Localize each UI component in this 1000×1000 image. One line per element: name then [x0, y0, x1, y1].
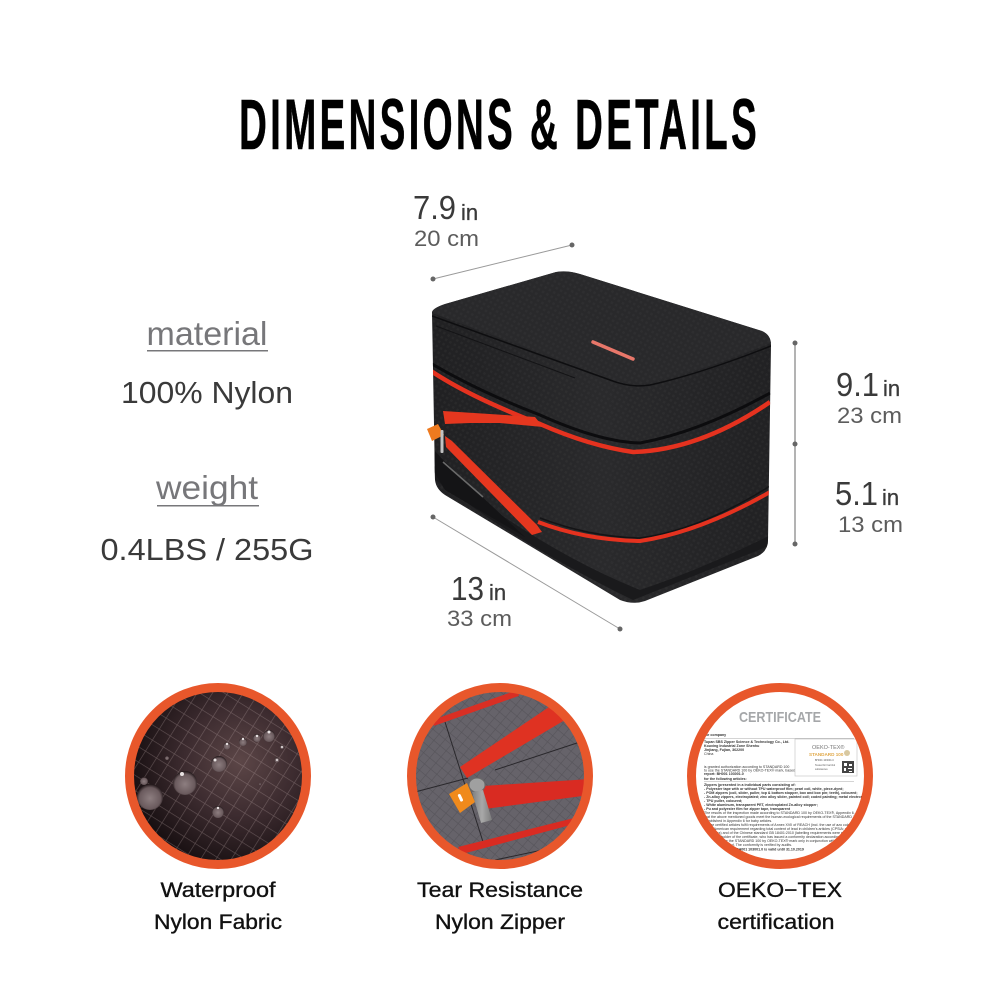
dimension: depth 13 in: 33 cm [447, 606, 512, 631]
certificate body text: BH001 103001.0 is valid until 31.10.2019 [736, 848, 804, 852]
dimension: width 7.9 in: 20 cm [414, 226, 479, 251]
certificate body text: China [704, 752, 713, 756]
dimension: height 9.1 in and 5.1 in: 13 cm [838, 512, 903, 537]
silver zipper pull [469, 778, 485, 792]
certificate body text: Jinjiang, Fujian, 362200 [704, 748, 744, 752]
droplet highlights [180, 730, 283, 809]
caption: tear resistance nylon zipper: Nylon Zipper [435, 911, 565, 934]
certificate body text: - Pu and polyester film for zipper tape, transparent [704, 807, 791, 811]
dimension: height 9.1 in and 5.1 in: 5.1 [835, 475, 878, 512]
lower red zipper line [538, 492, 770, 541]
zipper pull [440, 430, 444, 453]
red zipper tape top [433, 693, 518, 723]
lid handle [593, 342, 633, 359]
certificate body text: Zippers (presented in a individual parts consisting of: [704, 783, 796, 787]
certificate body text: The results of the inspection made according to STANDARD 100 by OEKO-TEX®, Appendix 6, product class II have shown [704, 811, 900, 815]
certificate body text [704, 734, 862, 850]
certificate body text: tested. The conformity is verified by audits. [724, 843, 792, 847]
red zipper band large [460, 705, 565, 778]
certificate body text: report: BH001 103001.0 [704, 772, 744, 776]
dimension: height 9.1 in and 5.1 in: in [882, 485, 899, 510]
certificate body text: - TPU puller, coloured; [704, 799, 742, 803]
dimension: width 7.9 in [413, 189, 574, 282]
certificate body text: the American requirement regarding total content of lead in children's articles (CPSIA; with the exception of accessories [708, 827, 898, 831]
certificate body text: Kouxing Industrial Zone Shenhu [704, 744, 759, 748]
ripstop grid [134, 692, 302, 860]
dimension: height 9.1 in and 5.1 in: in [883, 376, 900, 401]
grey ripstop background [416, 692, 584, 860]
orange tag [427, 424, 444, 441]
red zipper band middle [483, 779, 590, 809]
caption: OEKO-TEX certification: certification [718, 911, 834, 934]
dimension: height 9.1 in and 5.1 in: 23 cm [837, 403, 902, 428]
orange ring [692, 688, 868, 864]
OEKO-TEX label box: OEKO-TEX® [812, 744, 844, 751]
detail: waterproof fabric circle [125, 683, 311, 869]
caption: tear resistance nylon zipper [417, 879, 583, 934]
value: 100% Nylon: 100% Nylon [121, 375, 293, 410]
OEKO-TEX label box: BH001 103001.0 [815, 759, 834, 762]
value: 0.4LBS / 255G: 0.4LBS / 255G [100, 532, 314, 567]
caption: OEKO-TEX certification [718, 879, 842, 934]
caption: OEKO-TEX certification: OEKO−TEX [718, 879, 842, 902]
certificate body text: to use the STANDARD 100 by OEKO-TEX® mark, based [704, 768, 795, 772]
certificate body text: The certified articles fulfil requirements of Annex XVII of REACH (incl. the use of azo colourants, nickel release, etc.), [708, 823, 894, 827]
certificate body text: is granted authorization according to STANDARD 100 [704, 765, 789, 769]
dimension: width 7.9 in: in [461, 200, 478, 225]
certificate body text: - White aluminum, transparent PET, electroplated Zn-alloy stopper; [704, 803, 818, 807]
certificate body text: - Polyester tape with or without TPU waterproof film; pearl coil, white, piece-dyed; [704, 787, 844, 791]
dimension: depth 13 in [430, 514, 622, 632]
orange ring [130, 688, 306, 864]
certificate body text: the company [704, 733, 726, 737]
certificate body text: to use the STANDARD 100 by OEKO-TEX® mark only in conjunction with products that conform with the sample [718, 839, 897, 843]
certificate body text: established in Appendix 6 for baby articles. [704, 819, 772, 823]
caption: waterproof nylon fabric: Nylon Fabric [154, 911, 282, 934]
zipper flap upper [443, 411, 543, 427]
certificate body text: The holder of the certificate, who has issued a conformity declaration according to ISO 17050-1, is under an obligation [714, 835, 902, 839]
text block: weight [100, 469, 314, 567]
black handle strip [434, 450, 502, 516]
text block: material [121, 315, 293, 410]
upper zipper shadow [432, 364, 770, 443]
dimension: width 7.9 in: 7.9 [413, 189, 456, 226]
certificate body text: - Zn-alloy zippers, electroplated; zinc alloy slider, painted coil; coded painting; metal electroplated; [704, 795, 873, 799]
dimension: height 9.1 in and 5.1 in [792, 340, 903, 546]
fabric seams [415, 722, 590, 860]
OEKO-TEX label box: substances [815, 768, 828, 771]
heading: weight: weight [155, 469, 258, 506]
certificate body text: that the above mentioned goods meet the human-ecological requirements of the STANDARD 100 by OEKO-TEX® presently [704, 815, 902, 819]
certificate body text: of glass) and of the Chinese standard GB 18401:2010 (labelling requirements were not verified). [708, 831, 861, 835]
upper red zipper line [431, 371, 770, 452]
fabric background [134, 692, 302, 860]
orange ring [412, 688, 588, 864]
bag body [425, 265, 775, 610]
red zipper tape bottom [458, 817, 578, 854]
dimension: depth 13 in: 13 [451, 570, 484, 607]
certificate body text: for the following articles: [704, 777, 747, 781]
detail: nylon zipper circle [408, 684, 592, 868]
certificate body text: Tupan SBS Zipper Science & Technology Co., Ltd. [704, 740, 789, 744]
dimension: height 9.1 in and 5.1 in: 9.1 [836, 366, 879, 403]
detail: OEKO-TEX certificate circle [690, 686, 902, 866]
dimension: depth 13 in: in [489, 580, 506, 605]
certificate body text: - POM zippers (coil, slider, puller, top & bottom stopper, box and box pin; teeth), coloured; [704, 791, 858, 795]
lower zipper shadow [540, 486, 770, 538]
caption: tear resistance nylon zipper: Tear Resistance [417, 879, 583, 902]
OEKO-TEX label box [795, 739, 857, 776]
orange tag [449, 783, 475, 813]
OEKO-TEX label box: Tested for harmful [815, 764, 835, 767]
water droplets [137, 730, 284, 818]
caption: waterproof nylon fabric [154, 879, 282, 934]
product photo: expandable packing cube [425, 265, 775, 610]
bag lid [432, 271, 771, 343]
QR code [842, 761, 854, 773]
OEKO-TEX label box: STANDARD 100 [809, 752, 844, 757]
heading: material: material [146, 315, 268, 352]
zipper flap lower [445, 436, 542, 535]
certificate heading: CERTIFICATE [739, 709, 821, 726]
caption: waterproof nylon fabric: Waterproof [160, 879, 276, 902]
